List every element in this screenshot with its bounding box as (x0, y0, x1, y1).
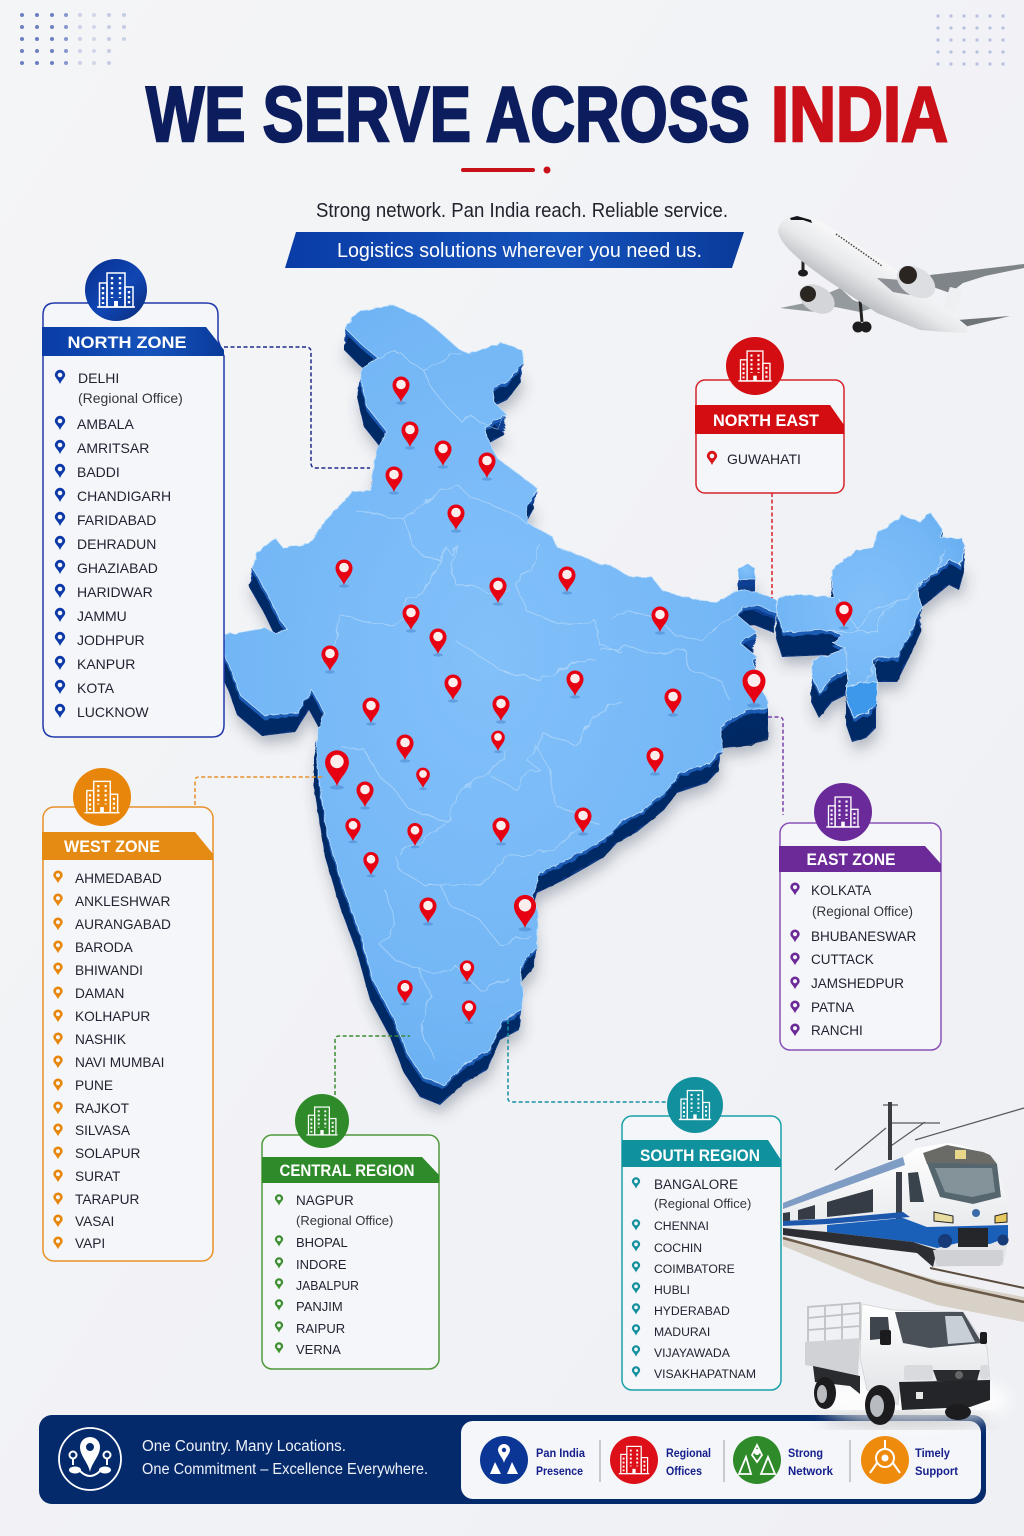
west zone cities (53, 871, 171, 1251)
north zone cities: CHANDIGARH (77, 488, 171, 504)
north zone cities: KANPUR (77, 656, 135, 672)
icon: south region building (667, 1077, 723, 1133)
central region cities (275, 1193, 393, 1357)
icon: north zone building (85, 259, 147, 321)
tagline banner: Logistics solutions wherever you need us. (337, 240, 702, 262)
icon: north east building (726, 337, 784, 395)
central region cities: NAGPUR (296, 1193, 354, 1208)
footer icon: network pin (59, 1428, 121, 1490)
feature: strong network: Network (788, 1464, 833, 1478)
panel: central region (262, 1094, 439, 1369)
connector: south region (508, 1020, 667, 1102)
airplane illustration (778, 216, 1024, 333)
footer message: One Commitment – Excellence Everywhere. (142, 1461, 428, 1478)
panel: west zone (42, 768, 213, 1261)
feature: strong network: Strong (788, 1446, 823, 1460)
south region cities: VISAKHAPATNAM (654, 1367, 756, 1381)
south region cities: MADURAI (654, 1325, 710, 1339)
title underline accent (461, 166, 550, 174)
north zone cities: KOTA (77, 680, 115, 696)
north zone cities (55, 370, 183, 720)
west zone banner (42, 832, 213, 860)
west zone cities: AURANGABAD (75, 917, 171, 932)
feature: timely support: Timely (915, 1446, 950, 1460)
west zone cities: VASAI (75, 1214, 114, 1229)
east zone banner (779, 846, 941, 872)
south region cities: COIMBATORE (654, 1262, 735, 1276)
east zone cities: BHUBANESWAR (811, 929, 917, 944)
north zone cities: HARIDWAR (77, 584, 153, 600)
west zone cities: BARODA (75, 940, 134, 955)
central region banner (262, 1157, 439, 1183)
east zone cities: JAMSHEDPUR (811, 976, 904, 991)
west zone cities: ANKLESHWAR (75, 894, 170, 909)
tagline banner (285, 232, 744, 268)
north zone cities: BADDI (77, 464, 120, 480)
south region cities: (Regional Office) (654, 1196, 751, 1211)
central region cities: RAIPUR (296, 1321, 345, 1336)
feature: strong network (733, 1436, 833, 1484)
central region cities: VERNA (296, 1342, 341, 1357)
north zone cities: JAMMU (77, 608, 127, 624)
icon: east zone building (814, 783, 872, 841)
connector: central region (335, 1036, 410, 1095)
north-east land (738, 512, 965, 717)
north zone cities: LUCKNOW (77, 704, 149, 720)
feature: regional offices: Offices (666, 1464, 702, 1478)
central region cities: JABALPUR (296, 1278, 359, 1293)
title: WE SERVE ACROSS (146, 70, 750, 158)
connector: north zone (224, 347, 370, 468)
footer message: One Country. Many Locations. (142, 1438, 346, 1455)
south region cities: CHENNAI (654, 1219, 709, 1233)
feature: pan india presence: Presence (536, 1464, 583, 1478)
west zone cities: NAVI MUMBAI (75, 1055, 164, 1070)
title: INDIA (771, 70, 948, 158)
west zone cities: DAMAN (75, 986, 124, 1001)
west zone cities: SILVASA (75, 1123, 131, 1138)
east zone cities: RANCHI (811, 1023, 863, 1038)
icon: west zone building (73, 768, 131, 826)
north zone banner: NORTH ZONE (68, 333, 186, 352)
west zone cities: SOLAPUR (75, 1146, 141, 1161)
panel: north east (695, 337, 844, 493)
north zone banner (42, 327, 224, 356)
feature: regional offices (610, 1436, 711, 1484)
train illustration (783, 1102, 1024, 1322)
south region cities: HYDERABAD (654, 1304, 730, 1318)
west zone cities: RAJKOT (75, 1101, 130, 1116)
west zone cities: AHMEDABAD (75, 871, 162, 886)
north zone cities: DEHRADUN (77, 536, 156, 552)
connector: north east (771, 493, 773, 598)
feature: pan india presence (480, 1436, 585, 1484)
east zone cities: CUTTACK (811, 952, 874, 967)
central region cities: PANJIM (296, 1299, 343, 1314)
north zone cities: DELHI (78, 370, 119, 386)
north east cities: GUWAHATI (727, 451, 801, 467)
west zone cities: PUNE (75, 1078, 113, 1093)
footer features panel (461, 1421, 981, 1499)
map of India (219, 305, 965, 1105)
south region cities: VIJAYAWADA (654, 1346, 731, 1360)
subtitle: Strong network. Pan India reach. Reliable service. (316, 200, 728, 222)
central region cities: (Regional Office) (296, 1213, 393, 1228)
south region banner (622, 1140, 781, 1167)
feature: pan india presence: Pan India (536, 1446, 585, 1460)
connector: west zone (195, 777, 325, 805)
north east banner (695, 405, 844, 434)
feature: timely support (861, 1436, 958, 1484)
decorative dots: top left (20, 13, 126, 65)
east zone banner: EAST ZONE (806, 850, 896, 869)
west zone banner: WEST ZONE (64, 837, 160, 856)
west zone cities: VAPI (75, 1236, 105, 1251)
east zone cities (790, 883, 917, 1038)
decorative dots: top right (936, 14, 1005, 66)
location pins (322, 376, 852, 1024)
icon: central region building (295, 1094, 349, 1148)
panel: north zone (42, 259, 224, 737)
state boundaries (320, 352, 945, 1060)
south region cities (632, 1177, 756, 1381)
central region banner: CENTRAL REGION (280, 1161, 414, 1180)
footer message (142, 1438, 428, 1478)
feature: regional offices: Regional (666, 1446, 711, 1460)
east zone cities: PATNA (811, 1000, 854, 1015)
panel: east zone (779, 783, 941, 1050)
west zone cities: BHIWANDI (75, 963, 143, 978)
north zone cities: (Regional Office) (78, 390, 183, 406)
north zone cities: FARIDABAD (77, 512, 156, 528)
south region cities: BANGALORE (654, 1177, 738, 1192)
north zone cities: AMBALA (77, 416, 134, 432)
connector: east zone (768, 717, 783, 815)
truck illustration (805, 1303, 1010, 1426)
west zone cities: KOLHAPUR (75, 1009, 150, 1024)
south region cities: COCHIN (654, 1241, 702, 1255)
south region cities: HUBLI (654, 1283, 690, 1297)
north zone cities: AMRITSAR (77, 440, 149, 456)
central region cities: BHOPAL (296, 1235, 348, 1250)
feature: timely support: Support (915, 1464, 958, 1478)
north zone cities: GHAZIABAD (77, 560, 158, 576)
east zone cities: KOLKATA (811, 883, 871, 898)
east zone cities: (Regional Office) (812, 904, 913, 919)
north zone cities: JODHPUR (77, 632, 145, 648)
panel: south region (622, 1077, 781, 1390)
footer bar (39, 1415, 986, 1504)
central region cities: INDORE (296, 1257, 347, 1272)
west zone cities: NASHIK (75, 1032, 126, 1047)
west zone cities: SURAT (75, 1169, 121, 1184)
north east banner: NORTH EAST (713, 411, 820, 430)
south region banner: SOUTH REGION (640, 1146, 760, 1165)
west zone cities: TARAPUR (75, 1192, 140, 1207)
